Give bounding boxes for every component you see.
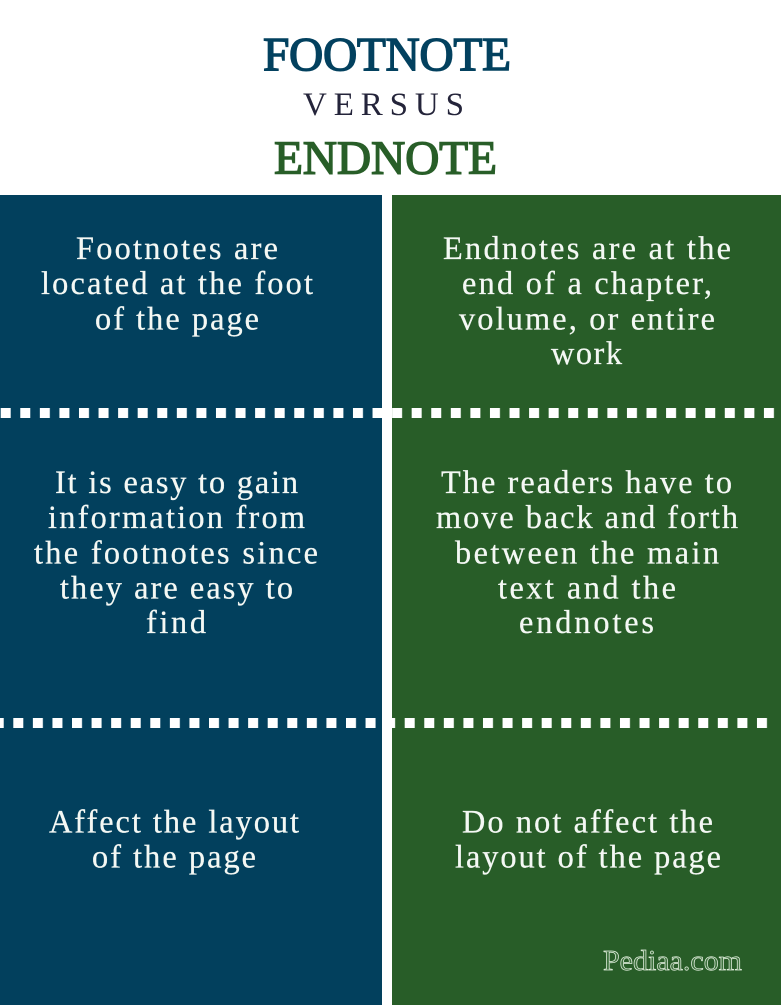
- title: versus: VERSUS: [303, 87, 464, 123]
- title: footnote: FOOTNOTE: [263, 30, 511, 82]
- text: endnote layout effect: Do not affect the: [462, 804, 713, 840]
- text: footnote location: of the page: [95, 300, 259, 336]
- text: footnote location: [41, 230, 313, 336]
- text: endnote layout effect: [455, 804, 721, 874]
- text: endnote ease of information: [436, 464, 738, 640]
- text: footnote ease of information: It is easy to gain: [55, 464, 298, 500]
- text: footnote location: Footnotes are: [76, 230, 278, 266]
- text: endnote location: work: [551, 335, 623, 371]
- text: endnote ease of information: text and the: [498, 570, 676, 606]
- logo: Pediaa.com: Pediaa.com: [603, 945, 742, 977]
- text: footnote ease of information: find: [146, 604, 206, 640]
- text: endnote ease of information: The readers have to: [441, 464, 732, 500]
- panel: endnote column: [392, 195, 781, 1005]
- text: endnote location: [443, 230, 731, 371]
- text: endnote location: Endnotes are at the: [443, 230, 731, 266]
- text: footnote ease of information: they are easy to: [60, 570, 293, 606]
- text: endnote ease of information: between the main: [455, 534, 719, 570]
- text: footnote ease of information: [34, 464, 318, 640]
- text: footnote ease of information: the footnotes since: [34, 534, 318, 570]
- title: endnote: ENDNOTE: [274, 133, 497, 185]
- text: footnote location: located at the foot: [41, 265, 313, 301]
- divider: first dotted row: [0, 408, 775, 418]
- text: endnote ease of information: endnotes: [519, 604, 654, 640]
- text: endnote layout effect: layout of the page: [455, 838, 721, 874]
- text: footnote ease of information: information from: [48, 499, 305, 535]
- text: endnote location: end of a chapter,: [462, 265, 712, 301]
- panel: footnote column: [0, 195, 382, 1005]
- text: endnote ease of information: move back and forth: [436, 499, 738, 535]
- text: footnote layout effect: Affect the layout: [49, 804, 299, 840]
- text: footnote layout effect: of the page: [92, 838, 256, 874]
- divider: second dotted row: [0, 718, 768, 728]
- text: endnote location: volume, or entire: [459, 300, 715, 336]
- text: footnote layout effect: [49, 804, 299, 874]
